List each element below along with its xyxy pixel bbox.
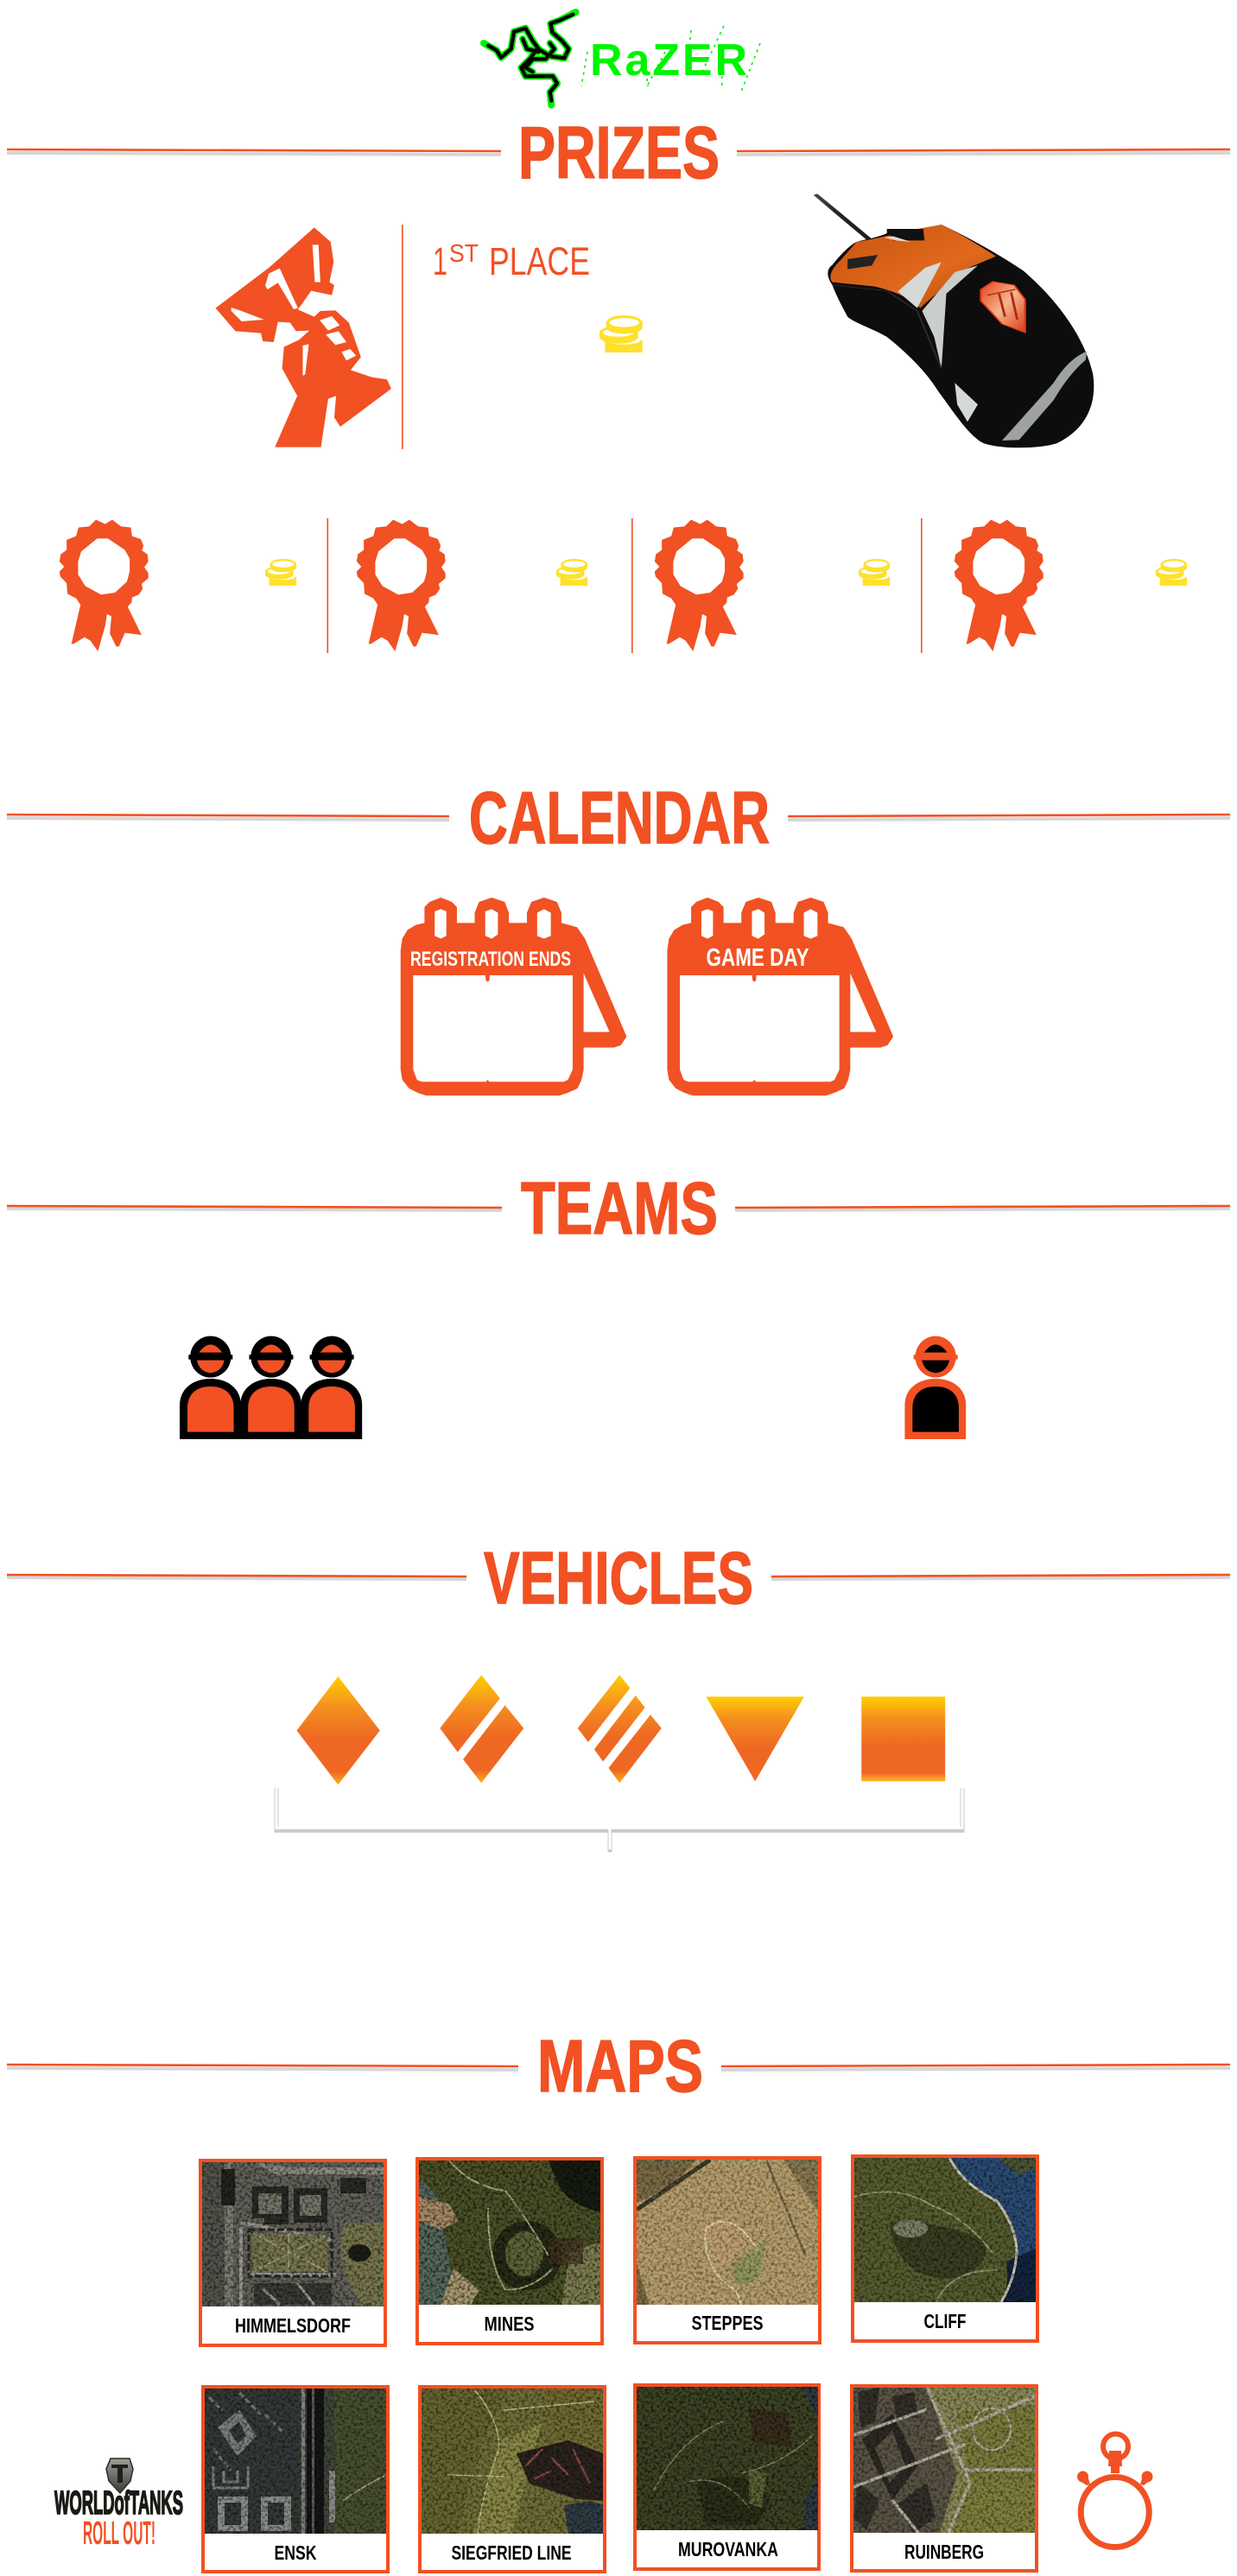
heading: Prizes: PRIZES: [518, 112, 720, 194]
map card: Steppes: [633, 2156, 821, 2344]
logo: World of Tanks Roll Out: [54, 2459, 183, 2552]
divider: [327, 518, 328, 653]
icon: calendar, game day: GAME DAY: [707, 944, 809, 972]
icon: team of three: [180, 1336, 362, 1439]
map card: Siegfried Line: [418, 2385, 606, 2573]
white stripes: [898, 262, 942, 308]
icon: reserve player: [904, 1336, 966, 1439]
divider: [921, 518, 923, 653]
icon: stopwatch: [1077, 2434, 1152, 2547]
panel: runner-up prizes: [60, 518, 1187, 653]
map card: Ensk: [201, 2385, 390, 2573]
divider: [631, 518, 633, 653]
heading: Vehicles: VEHICLES: [484, 1538, 753, 1620]
text: 1st place: ST: [449, 240, 479, 268]
icon: coins 3rd: [556, 559, 587, 586]
icon: artillery: [861, 1697, 945, 1781]
divider: first place: [402, 225, 403, 449]
map card: Mines: [416, 2157, 604, 2345]
icon: heavy tank: [578, 1675, 662, 1783]
text: 1st place: PLACE: [489, 239, 590, 283]
icon: light tank: [297, 1677, 380, 1785]
text: 1st place: 1: [433, 239, 447, 283]
map card: Himmelsdorf: [199, 2159, 387, 2347]
icon: Razer snake: [484, 12, 576, 105]
map card: Himmelsdorf: HIMMELSDORF: [235, 2314, 351, 2337]
icon: medium tank: [440, 1675, 523, 1783]
icon: calendar, registration ends: [401, 898, 626, 1095]
heading: Calendar: CALENDAR: [469, 777, 770, 860]
heading: Teams: TEAMS: [521, 1168, 718, 1250]
orange panel: [830, 225, 996, 308]
logo: Razer: [484, 12, 760, 105]
icon: calendar, game day: [667, 898, 893, 1095]
text: WORLDofTANKS: [54, 2485, 183, 2522]
icon: calendar, registration ends: REGISTRATION ENDS: [410, 948, 571, 971]
map card: Murovanka: [633, 2383, 821, 2571]
map card: Siegfried Line: SIEGFRIED LINE: [451, 2541, 572, 2564]
map card: Ruinberg: [850, 2384, 1038, 2573]
map card: Mines: MINES: [484, 2313, 534, 2335]
bracket: [276, 1786, 962, 1852]
logo: World of Tanks Roll Out: ROLL OUT!: [83, 2516, 155, 2552]
icon: coins, first place: [599, 315, 643, 352]
icon: coins 4th: [859, 559, 890, 586]
icon: shield emblem: [106, 2459, 133, 2493]
icon: rosette 5th: [955, 520, 1044, 651]
icon: coins 5th: [1156, 559, 1187, 586]
heading: Maps: MAPS: [537, 2026, 703, 2108]
wordmark: RaZER: [590, 35, 747, 86]
icon: rosette 4th: [655, 520, 744, 651]
map card: Cliff: [851, 2154, 1039, 2343]
WoT emblem: [980, 282, 1025, 333]
icon: rosette 2nd: [60, 520, 149, 651]
map card: Murovanka: MUROVANKA: [678, 2538, 778, 2560]
icon: coins 2nd: [265, 559, 296, 586]
icon: tank destroyer: [706, 1697, 804, 1781]
panel: vehicle classes: [297, 1675, 945, 1785]
mouse body: [828, 225, 1094, 447]
image: branded mouse: [815, 194, 1094, 447]
map card: Cliff: CLIFF: [924, 2310, 966, 2332]
map card: Ruinberg: RUINBERG: [904, 2541, 984, 2563]
text: 1st place: [433, 239, 590, 283]
map card: Steppes: STEPPES: [691, 2312, 764, 2334]
mouse cable: [815, 194, 869, 239]
icon: rosette 3rd: [357, 520, 446, 651]
icon: trophy in hand: [215, 227, 391, 447]
map card: Ensk: ENSK: [275, 2541, 317, 2564]
